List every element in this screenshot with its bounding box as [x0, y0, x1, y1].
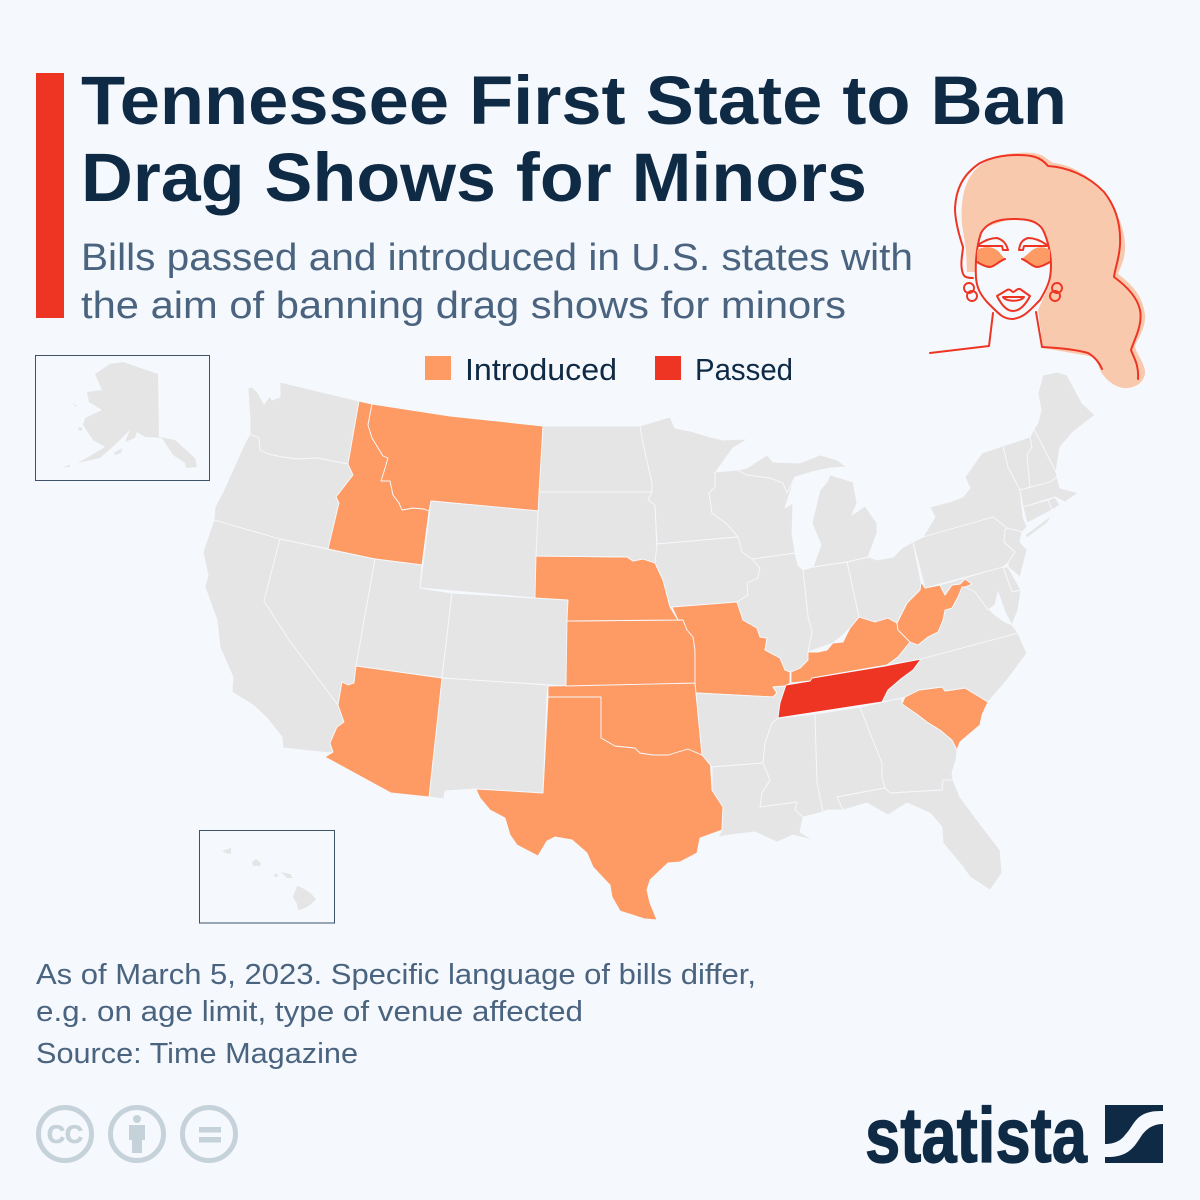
- accent bar: [36, 73, 64, 318]
- state: Minnesota: [640, 417, 748, 544]
- statista logo mark: [1105, 1105, 1163, 1163]
- state: Maryland: [940, 567, 1021, 625]
- state: Louisiana: [712, 763, 813, 842]
- state: Alabama: [815, 707, 885, 812]
- state: Washington: [248, 382, 359, 464]
- state: Oklahoma: [548, 683, 702, 755]
- state: Virginia: [887, 587, 1018, 665]
- lips: [997, 289, 1030, 311]
- US map: [203, 372, 1095, 920]
- title: [81, 62, 1067, 216]
- state: North Dakota: [539, 426, 652, 492]
- subtitle: [81, 237, 913, 327]
- state: New Mexico: [429, 678, 548, 799]
- eye shadow right: [1022, 247, 1050, 267]
- icon: creative commons: CC: [47, 1121, 83, 1149]
- footnote: Source: Time Magazine: [36, 1038, 358, 1070]
- inset: Alaska: [36, 356, 210, 480]
- state: North Carolina: [882, 633, 1027, 702]
- earrings: [964, 283, 1062, 301]
- state: Michigan upper peninsula: [737, 455, 847, 493]
- eye shadow left: [977, 247, 1005, 267]
- face outline: [976, 219, 1051, 319]
- state: New Hampshire: [1027, 429, 1057, 487]
- icon: no derivatives: [182, 1108, 236, 1160]
- inset: Hawaii: [200, 830, 334, 923]
- hair outline: [955, 155, 1141, 379]
- state: Texas: [476, 697, 723, 920]
- state: Arizona: [325, 666, 442, 797]
- legend: [425, 352, 793, 387]
- state: Florida: [837, 780, 1002, 890]
- state: Vermont: [1003, 437, 1032, 490]
- state: Rhode Island: [1048, 497, 1060, 510]
- state: South Dakota: [536, 492, 657, 563]
- state: Massachusetts: [1020, 477, 1078, 507]
- title: Tennessee First State to Ban: [81, 62, 1067, 139]
- statista wordmark: statista: [865, 1091, 1087, 1179]
- state: Connecticut: [1023, 500, 1052, 523]
- legend: Passed: [695, 352, 793, 387]
- state: Indiana: [803, 562, 859, 652]
- state: Pennsylvania: [913, 517, 1015, 588]
- footnote: As of March 5, 2023. Specific language of bills differ,: [36, 959, 756, 991]
- state: Tennessee: [778, 659, 921, 718]
- eyebrows and eye lines: [977, 238, 1050, 267]
- state: Kansas: [566, 620, 695, 686]
- state: Wisconsin: [709, 470, 795, 559]
- state: Ohio: [847, 542, 921, 623]
- state: Colorado: [442, 593, 568, 686]
- state: New Jersey: [1004, 528, 1027, 577]
- subtitle: the aim of banning drag shows for minors: [81, 285, 846, 327]
- neck and shoulders: [930, 312, 1102, 369]
- state: Mississippi: [760, 714, 823, 817]
- state: South Carolina: [902, 687, 988, 750]
- state: Montana: [368, 404, 543, 511]
- state: Nebraska: [535, 556, 678, 621]
- state: Georgia: [860, 698, 957, 793]
- state: California: [203, 520, 344, 753]
- icon: creative commons: [38, 1108, 92, 1160]
- state: West Virginia: [897, 579, 972, 645]
- state: Long Island: [1025, 515, 1052, 538]
- state: Wyoming: [420, 501, 539, 598]
- state: Utah: [356, 559, 452, 678]
- icon: attribution: [110, 1108, 164, 1160]
- state: Missouri: [672, 602, 790, 697]
- illustration: drag queen portrait: [930, 153, 1145, 388]
- subtitle: Bills passed and introduced in U.S. states with: [81, 237, 913, 279]
- footnote: e.g. on age limit, type of venue affected: [36, 996, 583, 1028]
- title: Drag Shows for Minors: [81, 139, 867, 216]
- legend: Introduced: [465, 352, 617, 387]
- state: Idaho: [328, 401, 429, 565]
- footnote: [36, 959, 756, 1070]
- state: Michigan lower peninsula: [812, 475, 877, 567]
- state: Iowa: [655, 537, 760, 608]
- state: Nevada: [264, 539, 375, 705]
- state: Arkansas: [696, 686, 786, 767]
- state: New York: [923, 446, 1027, 537]
- state: Oregon: [214, 434, 353, 549]
- state: Kentucky: [791, 617, 910, 683]
- state: Maine: [1034, 372, 1095, 472]
- state: Delaware: [1003, 567, 1021, 592]
- state: Illinois: [737, 553, 812, 672]
